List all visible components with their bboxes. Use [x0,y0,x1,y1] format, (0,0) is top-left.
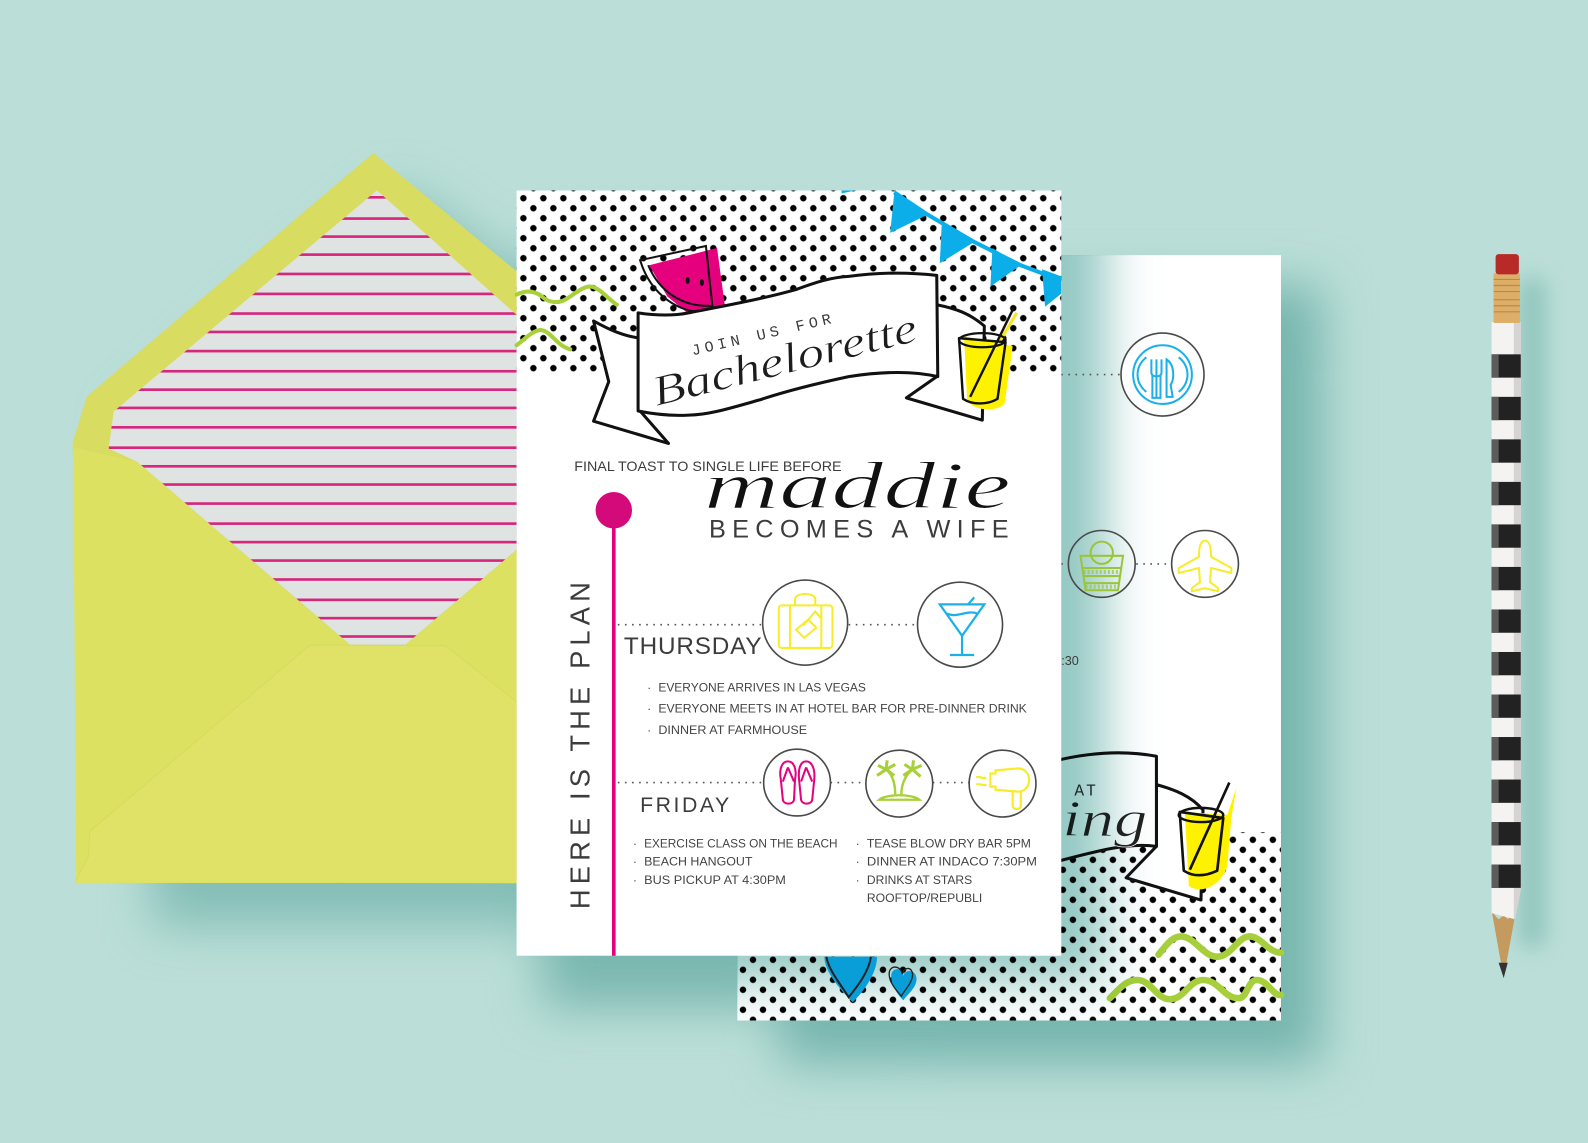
vertical heading: HERE IS THE PLAN [564,582,595,909]
back card plane connector [1136,563,1172,565]
pencil ferrule [1494,273,1520,323]
left tail [594,321,668,443]
back card bag connector [1061,563,1068,565]
friday list left: BEACH HANGOUT [644,856,752,869]
watermelon [640,246,725,314]
thursday list: EVERYONE MEETS IN AT HOTEL BAR FOR PRE-DINNER DRINK [658,703,1027,716]
green squiggle lower [517,330,570,349]
friday list left: · [633,837,637,850]
icon: beach bag [1068,530,1135,597]
friday list left: · [633,856,637,869]
pocket bottom edge cover [75,881,517,883]
right tail [906,305,984,420]
icon: airplane [1172,530,1238,597]
envelope flap [73,153,517,466]
becomes a wife: BECOMES A WIFE [709,516,1009,544]
thursday label: THURSDAY [624,633,762,660]
friday list right: · [856,874,860,887]
thursday list: EVERYONE ARRIVES IN LAS VEGAS [658,681,866,694]
small heart [889,967,917,1000]
soft shadows [122,187,1321,1063]
friday list right: DRINKS AT STARS [867,874,972,887]
icon: flip flops [764,749,830,816]
tagline: FINAL TOAST TO SINGLE LIFE BEFORE [574,459,842,474]
friday list right: DINNER AT INDACO 7:30PM [867,856,1037,869]
bunting [842,190,1061,307]
pencil body [1492,322,1521,924]
thursday list: · [647,703,651,716]
back glass [1179,783,1236,889]
green squiggle upper [517,287,617,305]
large heart [824,957,877,1002]
friday list left: EXERCISE CLASS ON THE BEACH [644,837,838,850]
join us for: JOIN US FOR [690,311,833,360]
friday label: FRIDAY [640,793,729,817]
green squiggle lower [1110,980,1281,999]
banner body [1053,753,1156,863]
back card plate connector [1061,374,1120,376]
banner text: AT [1074,783,1098,801]
pencil tip [1492,910,1515,978]
icon: suitcase [763,580,848,665]
thursday connector [618,624,918,626]
thursday list: · [647,681,651,694]
striped liner [102,187,519,648]
ribbon banner [594,273,984,443]
green squiggle upper [1158,936,1281,957]
pencil shadow [1519,278,1545,947]
icon: palm island [866,750,933,817]
timeline [596,492,632,956]
friday list right: · [856,856,860,869]
name: maddie [704,449,1011,523]
friday list right: ROOFTOP/REPUBLI [867,892,982,905]
pencil [1492,254,1545,978]
friday list left: · [633,874,637,887]
front card [517,190,1061,956]
bag weave [1084,572,1120,587]
back card [506,202,1281,1020]
envelope [73,153,519,883]
bachelorette: Bachelorette [647,304,922,416]
back card hidden time fragment: :30 [1061,654,1079,668]
thursday list: · [647,724,651,737]
friday list right: TEASE BLOW DRY BAR 5PM [867,837,1031,850]
icon: martini [918,582,1003,667]
shadow cast by front card [737,255,1140,1016]
banner body [638,273,938,415]
back card dot pattern [737,832,1281,1020]
front dot pattern [517,190,1061,373]
icon: hair dryer [969,750,1036,817]
friday list left: BUS PICKUP AT 4:30PM [644,874,786,887]
friday list left [633,837,838,887]
pocket lower fold [75,645,517,883]
thursday list: DINNER AT FARMHOUSE [658,724,807,737]
pencil eraser [1496,254,1519,274]
icon: plate [1121,333,1204,416]
glass of lemonade [959,308,1017,409]
friday connector [618,782,969,784]
banner script text: ing [1062,791,1147,847]
thursday list [647,681,1027,737]
friday list right [856,837,1037,905]
back banner [1053,753,1203,900]
banner tail [1126,785,1203,900]
envelope pocket [73,447,517,883]
friday list right: · [856,837,860,850]
